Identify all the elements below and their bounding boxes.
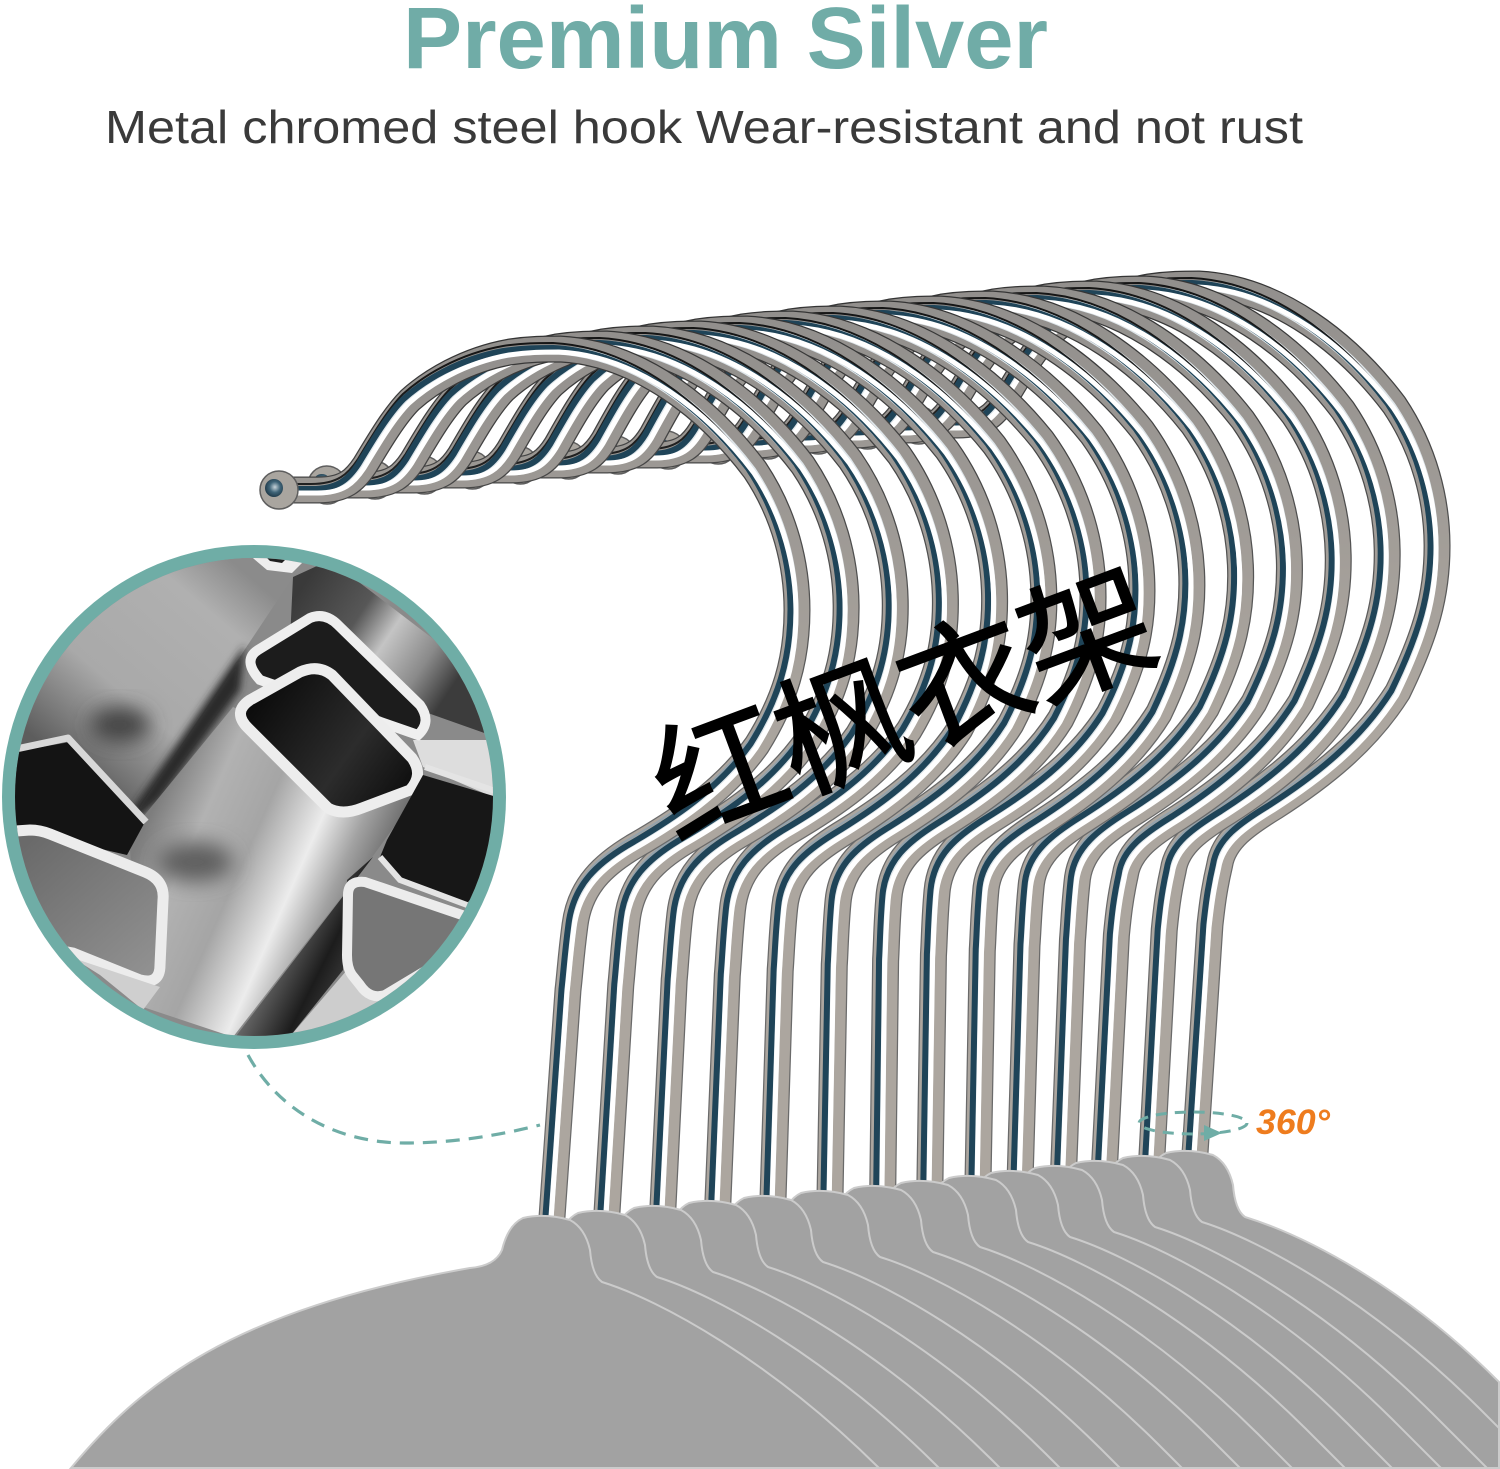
hanger body 14	[713, 1151, 1499, 1468]
hook 4	[401, 328, 963, 1205]
chromed steel hanger hooks	[260, 278, 1440, 1220]
hook 6	[493, 318, 1075, 1195]
hanger body 1	[71, 1216, 879, 1468]
icon: 360 rotation arrow	[1139, 1112, 1247, 1141]
hook 9	[641, 303, 1223, 1180]
tube mouth: top small	[253, 558, 302, 573]
tube mouth: lower right grey	[347, 882, 465, 996]
hook 11	[744, 293, 1309, 1170]
hook 8	[590, 308, 1175, 1185]
hanger body 10	[538, 1171, 1392, 1468]
hanger body 2	[125, 1211, 939, 1468]
label: 360 degrees: 360°	[1256, 1103, 1331, 1142]
hanger body 6	[348, 1191, 1182, 1468]
hook 2	[307, 338, 852, 1215]
hanger body 4	[236, 1201, 1060, 1468]
watermark: 红枫衣架	[633, 545, 1175, 866]
tube side: lower right	[293, 972, 382, 1033]
hanger body 8	[448, 1181, 1292, 1468]
hook 12	[796, 288, 1350, 1165]
hook 7	[540, 313, 1128, 1190]
hanger body 13	[670, 1156, 1499, 1468]
dashed callout connector	[248, 1055, 540, 1143]
tube mouth: centre	[240, 669, 418, 812]
hanger body 9	[496, 1176, 1345, 1468]
hook 10	[692, 298, 1265, 1175]
tube mouth: right dark	[380, 775, 493, 902]
tube mouth: lower left grey	[2, 830, 163, 981]
hook 13	[846, 283, 1397, 1160]
hook 1	[260, 343, 797, 1220]
hook 5	[447, 323, 1018, 1200]
hook 3	[353, 333, 908, 1210]
hanger body 7	[401, 1186, 1240, 1468]
hanger body 5	[291, 1196, 1120, 1468]
hook 14	[899, 278, 1440, 1155]
callout: steel tube close-up circle	[2, 545, 507, 1050]
subtitle: Metal chromed steel hook Wear-resistant and not rust	[105, 101, 1303, 153]
hanger body 12	[623, 1161, 1487, 1468]
hanger body 3	[181, 1206, 1000, 1468]
tube mouth: upper back	[250, 616, 426, 735]
hanger body 11	[582, 1166, 1441, 1468]
tube mouth: left black	[2, 742, 145, 855]
grey felt hanger bodies	[71, 1151, 1499, 1468]
